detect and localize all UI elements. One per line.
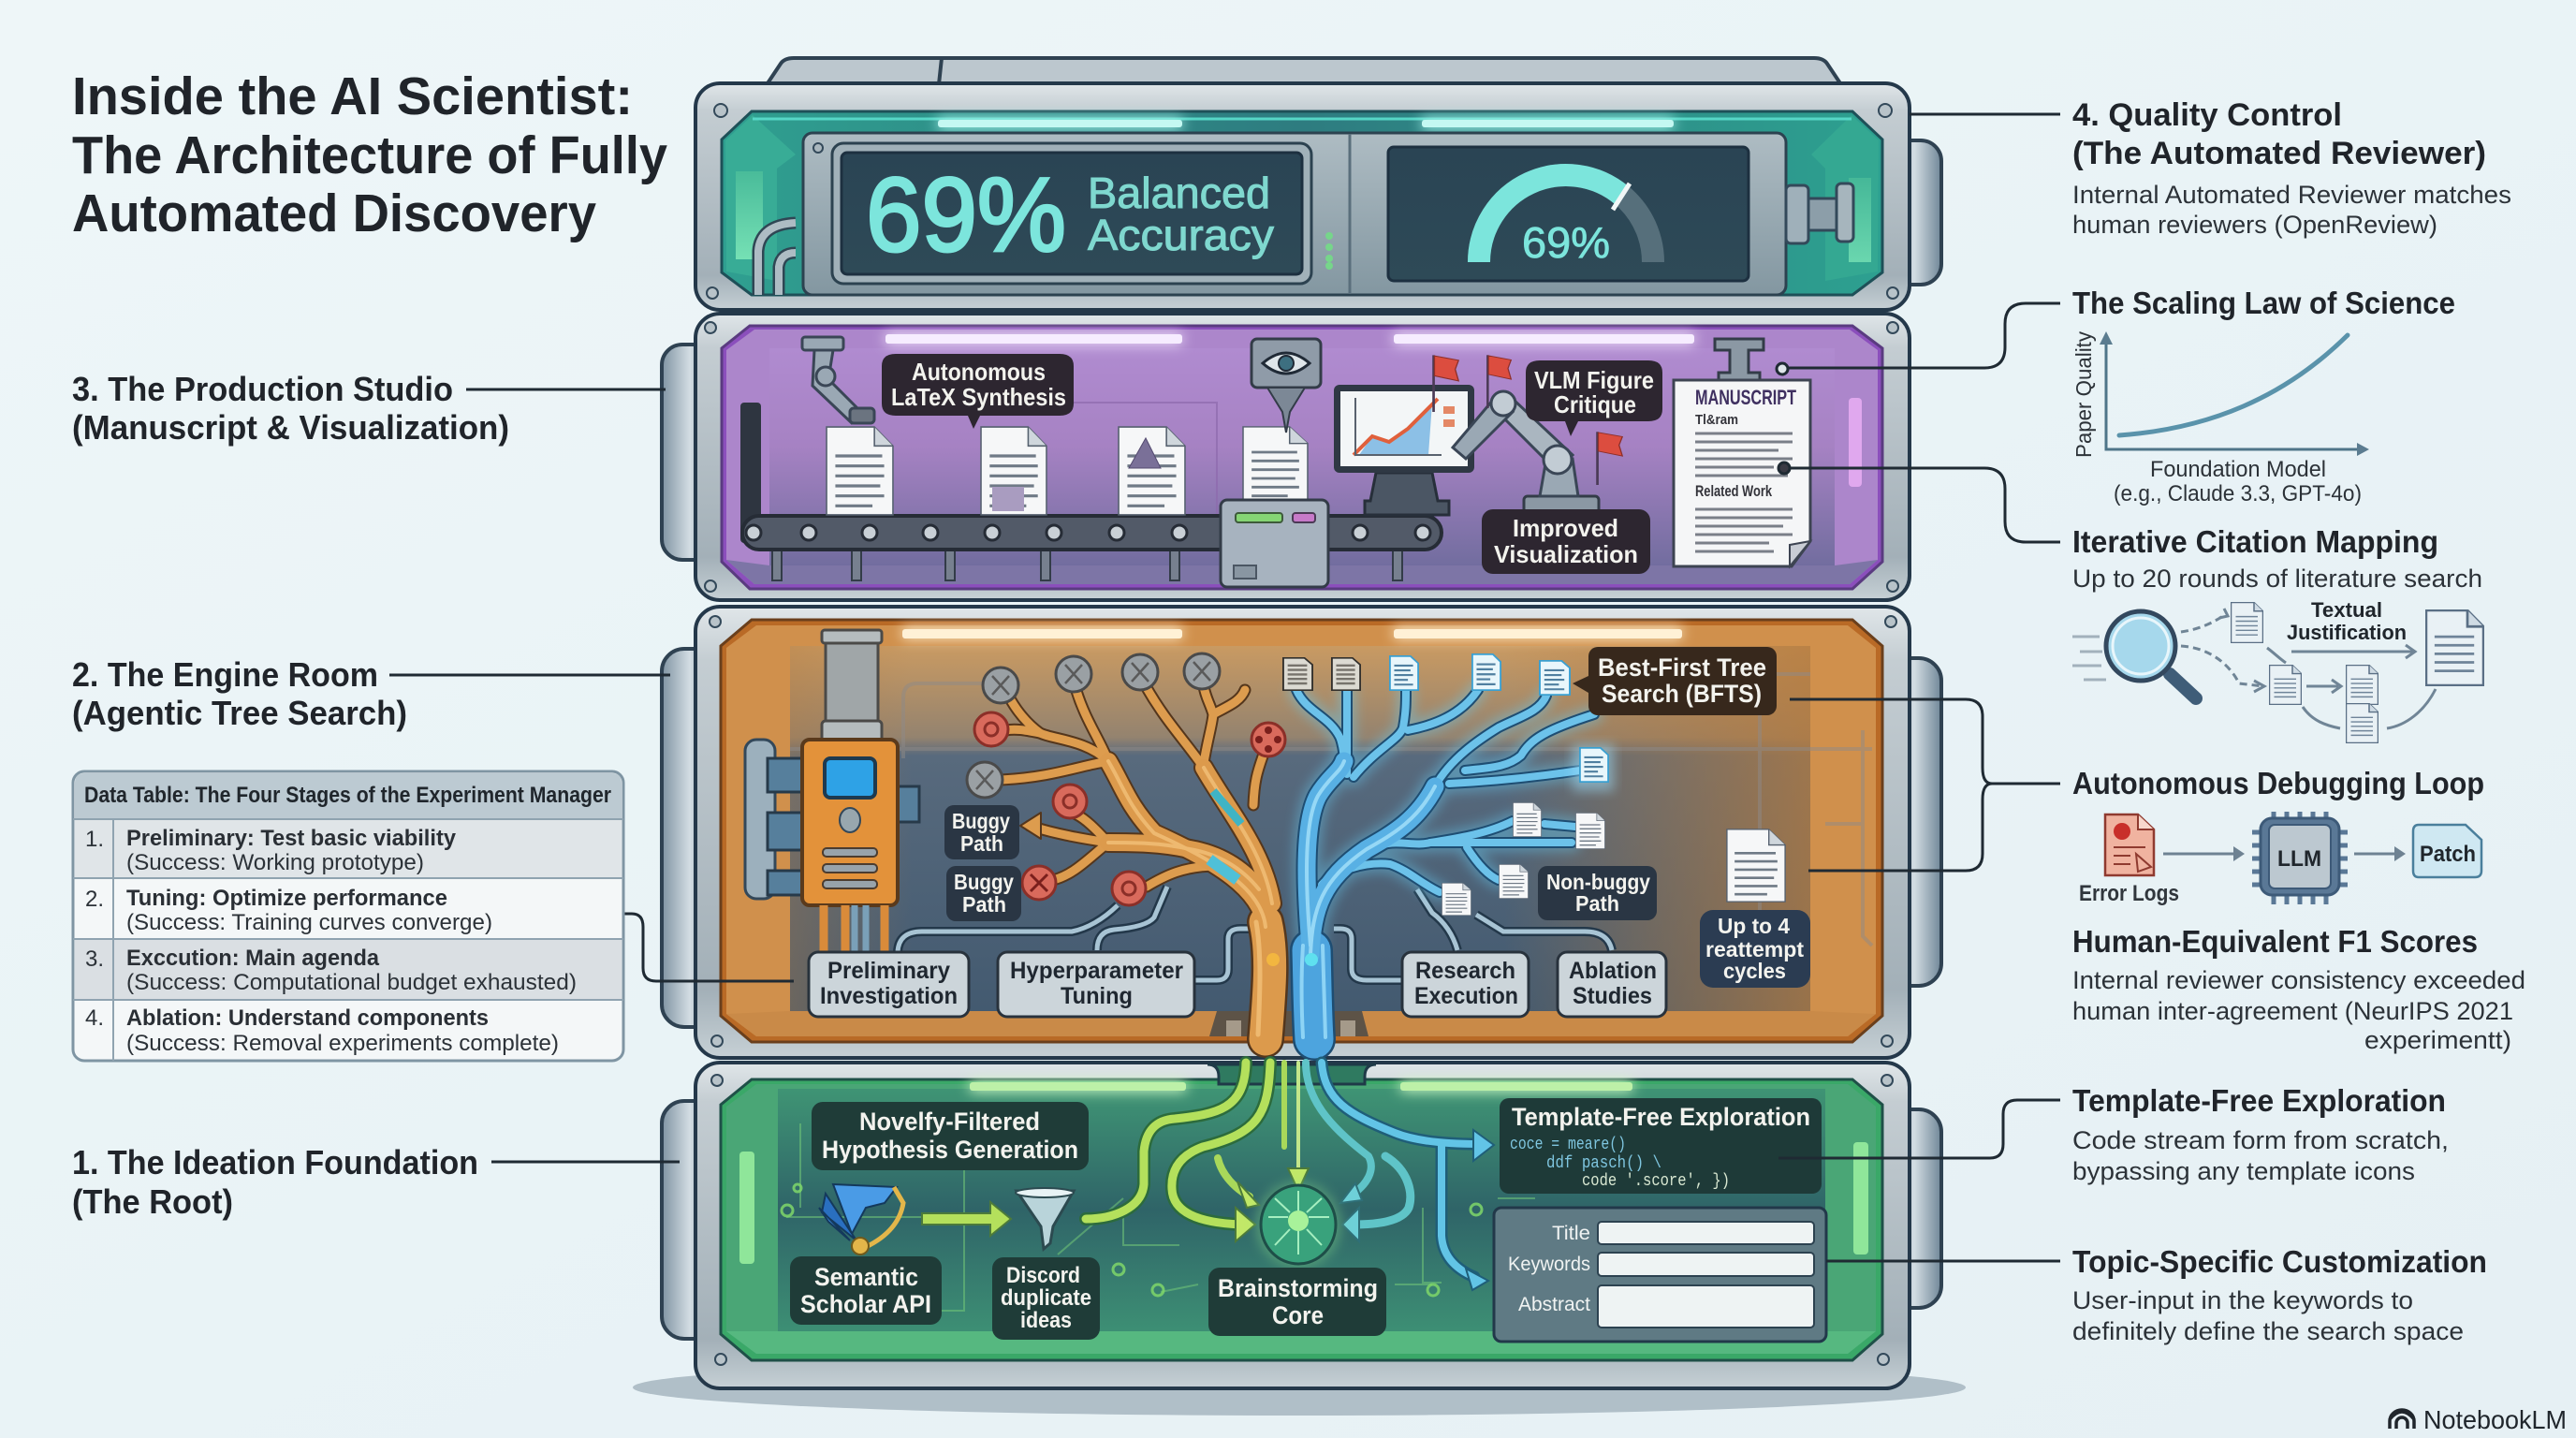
heading: engine room	[72, 655, 407, 732]
row 4: 4.	[85, 1005, 104, 1031]
heading: production studio	[72, 370, 509, 447]
label: discord duplicate ideas: Discord	[1006, 1263, 1080, 1288]
stage: research execution: Execution	[1414, 983, 1518, 1009]
callout: human-equivalent f1 scores	[2072, 924, 2525, 1054]
label: novelty-filtered hypothesis generation	[812, 1102, 1089, 1170]
label: semantic scholar api	[790, 1256, 942, 1325]
label: buggy path 1: Buggy	[952, 809, 1010, 833]
label: vlm figure critique: Critique	[1554, 390, 1636, 418]
code panel: template-free exploration: code '.score', })	[1582, 1172, 1730, 1191]
callout: topic-specific customization	[2072, 1244, 2487, 1345]
label: reattempt cycles: reattempt	[1705, 937, 1804, 961]
row 3	[85, 946, 577, 995]
input form: Title	[1552, 1223, 1590, 1244]
title: The Architecture of Fully	[72, 125, 667, 185]
pipe arrowheads	[922, 1130, 1494, 1290]
callout: topic-specific customization: User-input in the keywords to	[2072, 1286, 2413, 1314]
icon: patch: Patch	[2420, 842, 2476, 867]
row 3: 3.	[85, 946, 104, 972]
label: autonomous latex synthesis: Autonomous	[912, 358, 1046, 386]
heading: engine room: 2. The Engine Room	[72, 655, 378, 694]
icon: llm chip	[2252, 812, 2348, 904]
label: textual justification	[2287, 598, 2407, 644]
row 2: 2.	[85, 887, 104, 912]
label: autonomous latex synthesis: LaTeX Synthesis	[891, 383, 1066, 411]
callout: human-equivalent f1 scores: experimentt)	[2364, 1026, 2511, 1054]
background conduits	[790, 674, 1872, 946]
conveyor belt	[742, 516, 1442, 580]
heading: production studio: (Manuscript & Visualization)	[72, 408, 509, 447]
label: novelty-filtered hypothesis generation: Hypothesis Generation	[822, 1136, 1078, 1164]
circuit traces	[786, 1123, 1535, 1311]
balanced accuracy label: Balanced	[1088, 169, 1270, 217]
row 1	[85, 826, 457, 875]
label: improved visualization: Visualization	[1494, 540, 1638, 568]
row 1: 1.	[85, 827, 104, 852]
label: textual justification: Textual	[2311, 598, 2382, 622]
module 2: engine room	[695, 607, 1910, 1058]
stage: ablation studies	[1558, 952, 1666, 1017]
stage: research execution: Research	[1415, 958, 1515, 984]
robot arm: left	[802, 337, 874, 423]
callout: template-free exploration: Template-Free Exploration	[2072, 1083, 2446, 1118]
stage: ablation studies: Studies	[1573, 983, 1652, 1009]
documents on belt	[827, 427, 1308, 515]
label: best-first tree search: Search (BFTS)	[1602, 680, 1762, 708]
title	[72, 66, 667, 243]
input form: Abstract	[1518, 1294, 1590, 1315]
stage: preliminary investigation	[809, 952, 969, 1017]
manuscript page: Related Work	[1695, 482, 1772, 500]
heading: autonomous debugging loop: Autonomous Debugging Loop	[2072, 766, 2484, 800]
input form	[1494, 1208, 1826, 1342]
table header: Data Table: The Four Stages of the Experiment Manager	[84, 783, 611, 808]
callout: template-free exploration: Code stream form from scratch,	[2072, 1126, 2449, 1154]
label: reattempt cycles: cycles	[1723, 959, 1786, 983]
label: novelty-filtered hypothesis generation: Novelfy-Filtered	[859, 1108, 1040, 1136]
manuscript page: MANUSCRIPT	[1695, 386, 1796, 409]
floor gap	[1209, 1011, 1368, 1036]
citation arrows	[2181, 609, 2436, 728]
callout: quality control: Internal Automated Reviewer matches	[2072, 181, 2511, 209]
label: buggy path 1: Path	[960, 831, 1003, 856]
row 3: (Success: Computational budget exhausted)	[126, 970, 577, 995]
label: autonomous latex synthesis	[882, 354, 1074, 429]
stage: preliminary investigation: Investigation	[820, 983, 958, 1009]
row 2: Tuning: Optimize performance	[126, 886, 447, 911]
piston right	[1786, 183, 1853, 243]
console panel	[803, 133, 1786, 295]
notebooklm logo: NotebookLM	[2423, 1405, 2567, 1434]
processing machine	[1221, 500, 1328, 587]
callout: quality control: (The Automated Reviewer)	[2072, 136, 2486, 171]
arrow: llm to patch	[2394, 846, 2406, 861]
balanced accuracy label	[1088, 169, 1274, 259]
callout: human-equivalent f1 scores: human inter-agreement (NeurIPS 2021	[2072, 997, 2513, 1025]
heading: scaling law: The Scaling Law of Science	[2072, 286, 2455, 320]
callout: topic-specific customization: Topic-Specific Customization	[2072, 1244, 2487, 1279]
manuscript page	[1674, 380, 1810, 566]
manuscript page: Tl&ram	[1695, 412, 1738, 428]
label: best-first tree search	[1573, 647, 1777, 715]
data pipes	[1086, 1063, 1479, 1277]
row 4: (Success: Removal experiments complete)	[126, 1031, 559, 1056]
stage: research execution	[1402, 952, 1529, 1017]
label: improved visualization: Improved	[1513, 514, 1618, 542]
label: non-buggy path: Path	[1575, 891, 1619, 916]
callout: topic-specific customization: definitely define the search space	[2072, 1317, 2464, 1345]
top cap	[766, 58, 1842, 86]
result documents	[1283, 654, 1614, 916]
callout: quality control	[2072, 97, 2511, 239]
module 4: quality control	[695, 83, 1910, 310]
module 1: ideation foundation	[695, 1063, 1910, 1388]
floor pipe conduits	[898, 887, 1612, 980]
scanner eye	[1251, 339, 1321, 433]
label: non-buggy path: Non-buggy	[1546, 870, 1650, 894]
input form: Keywords	[1508, 1254, 1590, 1275]
stage: hyperparameter tuning: Tuning	[1061, 983, 1133, 1009]
brainstorming core orb	[1255, 1181, 1341, 1268]
blue tree: non-buggy paths	[1296, 690, 1594, 1039]
pipe notch	[1208, 1064, 1376, 1084]
label: error logs: Error Logs	[2079, 881, 2179, 906]
row 1: Preliminary: Test basic viability	[126, 826, 457, 851]
leader lines	[389, 114, 2060, 1261]
callout: citation mapping: Iterative Citation Mapping	[2072, 524, 2438, 559]
heading: production studio: 3. The Production Studio	[72, 370, 453, 408]
stage: preliminary investigation: Preliminary	[827, 958, 950, 984]
label: discord duplicate ideas: duplicate	[1001, 1285, 1091, 1311]
label: non-buggy path	[1538, 866, 1657, 920]
stage: hyperparameter tuning: Hyperparameter	[1010, 958, 1183, 984]
callout: human-equivalent f1 scores: Internal reviewer consistency exceeded	[2072, 966, 2525, 994]
callout: template-free exploration	[2072, 1083, 2449, 1185]
label: brainstorming core: Core	[1272, 1301, 1324, 1329]
icon: semantic scholar	[819, 1184, 903, 1255]
manuscript hanger	[1715, 339, 1764, 380]
chart: scaling law curve: (e.g., Claude 3.3, GPT-4o)	[2114, 481, 2362, 506]
data table: four stages	[73, 771, 623, 1061]
label: discord duplicate ideas: ideas	[1020, 1308, 1072, 1333]
gauge value: 69%	[1522, 218, 1610, 267]
label: vlm figure critique: VLM Figure	[1534, 366, 1654, 394]
stack ground shadow	[633, 1359, 1966, 1416]
debugging diagram	[2079, 812, 2481, 906]
label: reattempt cycles	[1700, 910, 1810, 988]
title: Automated Discovery	[72, 183, 596, 243]
stage: hyperparameter tuning	[998, 952, 1194, 1017]
orange tree: buggy paths	[1002, 686, 1280, 1039]
code panel: template-free exploration: Template-Free Exploration	[1512, 1103, 1810, 1131]
label: improved visualization	[1482, 509, 1650, 574]
heading: engine room: (Agentic Tree Search)	[72, 694, 407, 732]
chart: scaling law curve	[2071, 331, 2369, 506]
display: balanced accuracy	[832, 143, 1311, 284]
icon: llm chip: LLM	[2277, 846, 2321, 872]
callout: citation mapping: Up to 20 rounds of literature search	[2072, 565, 2482, 593]
row 2	[85, 886, 492, 935]
reattempt document	[1727, 829, 1785, 902]
code panel: template-free exploration	[1500, 1098, 1822, 1194]
callout: template-free exploration: bypassing any template icons	[2072, 1157, 2415, 1185]
label: semantic scholar api: Scholar API	[800, 1290, 931, 1318]
label: discord duplicate ideas	[992, 1257, 1100, 1340]
y axis label: Paper Quality	[2071, 331, 2096, 458]
stage: ablation studies: Ablation	[1569, 958, 1657, 984]
69% value: 69%	[866, 156, 1066, 273]
code panel: template-free exploration: coce = meare()	[1510, 1136, 1626, 1154]
balanced accuracy label: Accuracy	[1088, 211, 1274, 259]
robot arm: critique	[1453, 391, 1599, 513]
row 3: Exccution: Main agenda	[126, 946, 380, 971]
label: brainstorming core	[1208, 1268, 1386, 1336]
failed node markers	[967, 653, 1285, 905]
icon: filter funnel	[1016, 1188, 1074, 1249]
label: buggy path 1	[944, 805, 1019, 859]
module 3: production studio	[695, 314, 1910, 600]
row 4: Ablation: Understand components	[126, 1005, 489, 1031]
heading: ideation foundation: 1. The Ideation Foundation	[72, 1143, 478, 1181]
label: buggy path 2	[946, 866, 1021, 921]
status leds	[1325, 232, 1333, 270]
label: buggy path 2: Buggy	[954, 870, 1014, 894]
icon: error log	[2105, 814, 2154, 875]
pipes left	[758, 223, 796, 295]
arrow: logs to llm	[2233, 846, 2245, 861]
display: gauge	[1388, 147, 1749, 281]
label: vlm figure critique	[1526, 360, 1662, 436]
control machine	[745, 630, 919, 952]
icon: patch	[2413, 825, 2481, 877]
label: buggy path 2: Path	[962, 892, 1006, 917]
side housings	[662, 140, 1941, 1339]
x axis label: Foundation Model	[2150, 457, 2326, 482]
label: textual justification: Justification	[2287, 621, 2407, 644]
label: reattempt cycles: Up to 4	[1718, 914, 1790, 938]
citation diagram	[2072, 598, 2483, 743]
callout: quality control: human reviewers (OpenReview)	[2072, 211, 2437, 239]
row 4	[85, 1005, 559, 1056]
red flags	[1434, 355, 1622, 485]
heading: ideation foundation	[72, 1143, 478, 1221]
callout: quality control: 4. Quality Control	[2072, 97, 2342, 133]
code panel: template-free exploration: ddf pasch() \	[1546, 1154, 1661, 1173]
icon: magnifier	[2072, 611, 2196, 698]
heading: ideation foundation: (The Root)	[72, 1182, 233, 1221]
label: semantic scholar api: Semantic	[814, 1263, 918, 1291]
label: brainstorming core: Brainstorming	[1218, 1274, 1378, 1302]
title: Inside the AI Scientist:	[72, 66, 633, 126]
row 1: (Success: Working prototype)	[126, 850, 424, 875]
server stack	[662, 58, 1941, 1388]
buggy arrowhead	[1020, 813, 1041, 839]
monitor with chart	[1334, 385, 1474, 515]
row 2: (Success: Training curves converge)	[126, 910, 492, 935]
callout: human-equivalent f1 scores: Human-Equivalent F1 Scores	[2072, 924, 2478, 959]
label: best-first tree search: Best-First Tree	[1598, 653, 1766, 682]
callout: citation mapping	[2072, 524, 2482, 593]
